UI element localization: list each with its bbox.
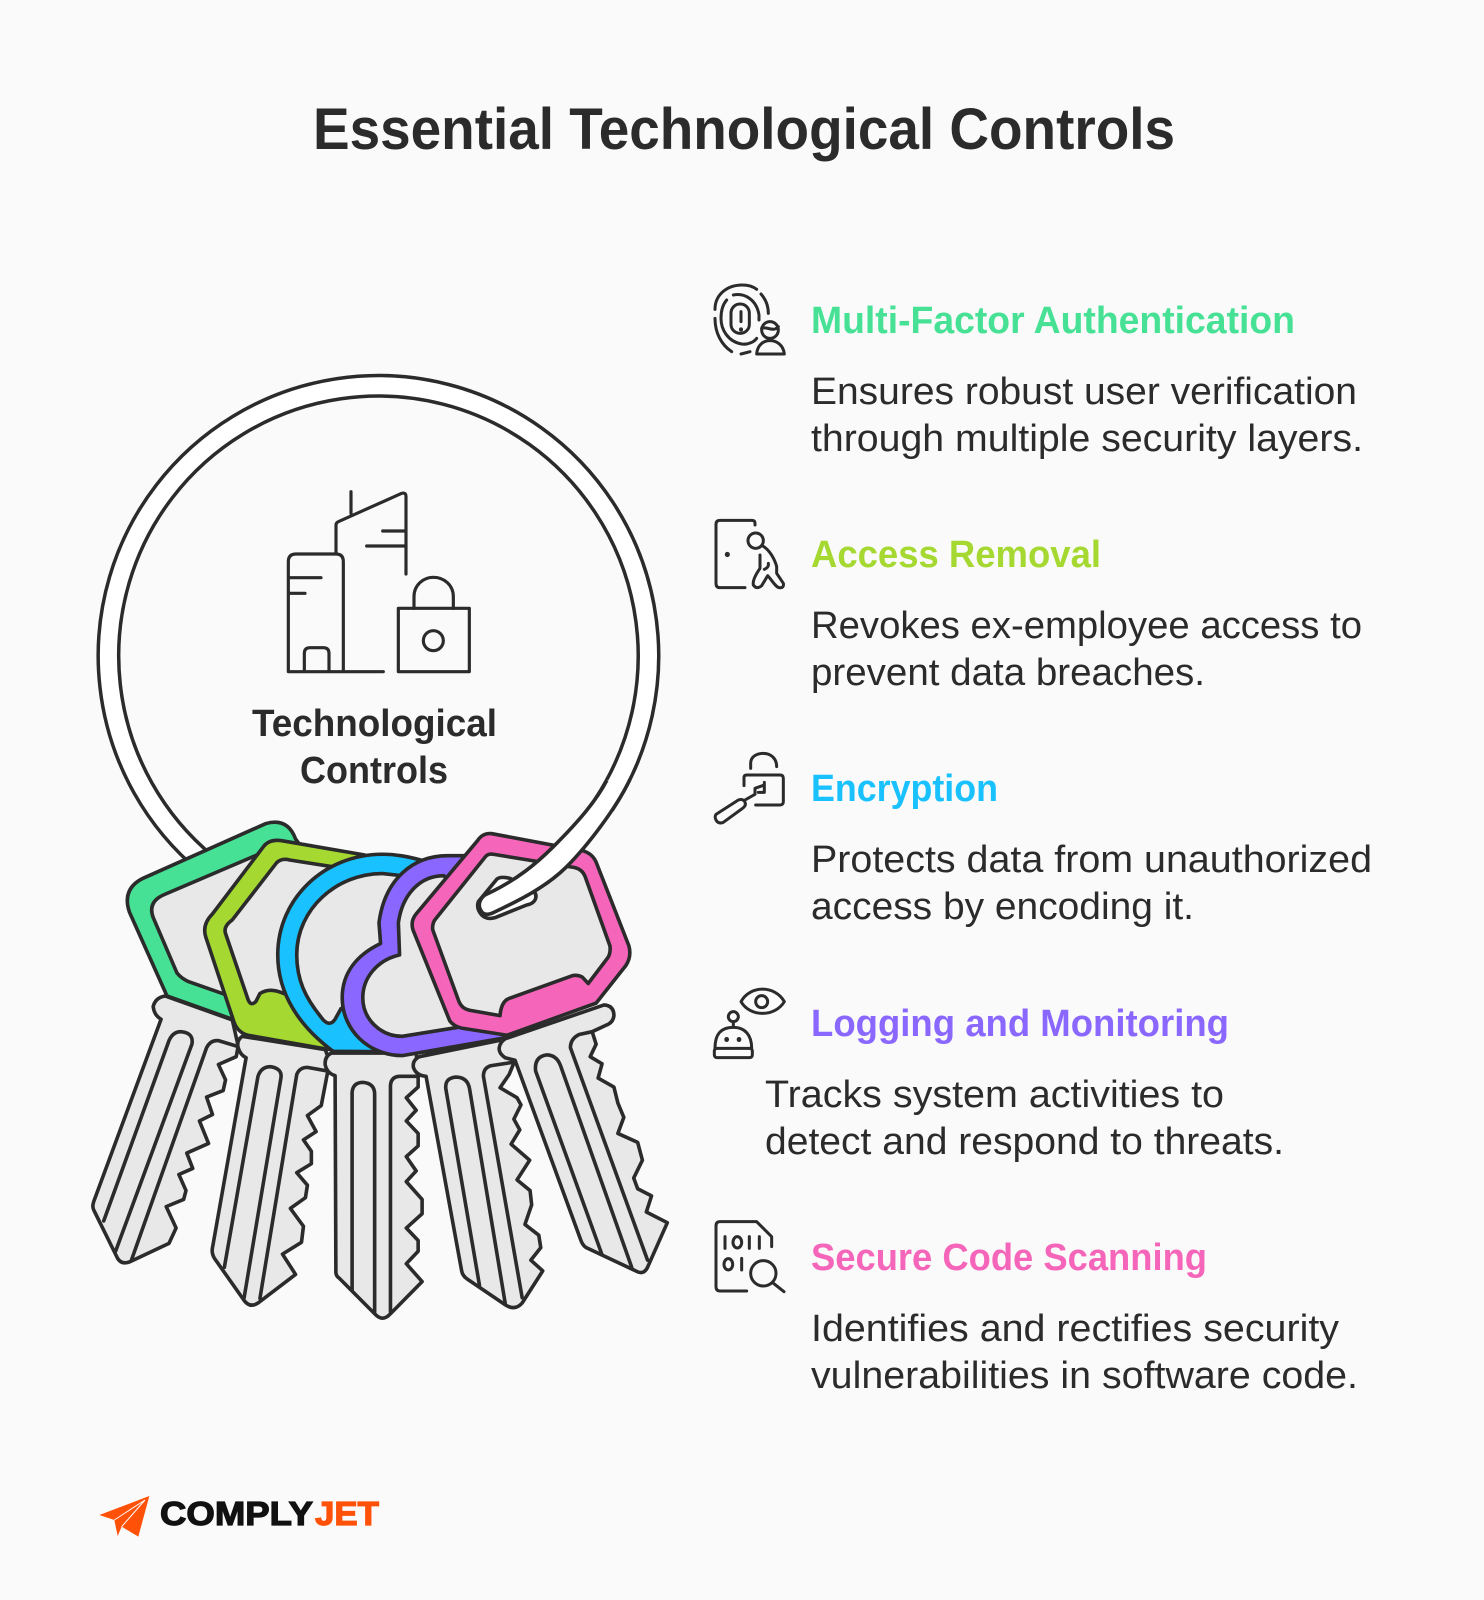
heading: Multi-Factor Authentication xyxy=(811,300,1295,342)
tag: lime xyxy=(205,840,396,1050)
key 2 xyxy=(212,1036,329,1305)
description xyxy=(811,839,1372,928)
title: Essential Technological Controls xyxy=(313,97,1175,162)
wordmark: JET xyxy=(315,1495,379,1532)
logo: ComplyJet xyxy=(99,1495,379,1537)
key 4 xyxy=(413,1039,543,1308)
key ring back xyxy=(108,386,648,864)
icon: buildings and padlock xyxy=(288,492,469,672)
wordmark: COMPLY xyxy=(160,1495,313,1532)
icon: binary file and magnifier xyxy=(716,1222,784,1292)
description: prevent data breaches. xyxy=(811,652,1205,694)
panel: logging and monitoring xyxy=(714,989,1284,1163)
heading: Secure Code Scanning xyxy=(811,1237,1207,1279)
icon: fingerprint and user xyxy=(715,285,784,354)
description: vulnerabilities in software code. xyxy=(811,1355,1358,1397)
illustration: key ring with five keys xyxy=(93,386,667,1318)
tag: purple xyxy=(342,856,515,1056)
key 5 xyxy=(499,1005,667,1273)
key 3 xyxy=(325,1053,422,1318)
tag: pink xyxy=(412,833,630,1035)
icon: person leaving door xyxy=(716,520,783,588)
central label: Technological xyxy=(252,703,497,745)
icon: paper plane xyxy=(99,1496,149,1537)
description: Protects data from unauthorized xyxy=(811,839,1372,881)
heading: Access Removal xyxy=(811,534,1101,576)
description: detect and respond to threats. xyxy=(765,1121,1284,1163)
description: access by encoding it. xyxy=(811,886,1194,928)
key 1 xyxy=(93,996,238,1263)
description xyxy=(811,1308,1358,1397)
icon: lock pick xyxy=(715,753,783,823)
description xyxy=(811,371,1363,460)
description xyxy=(811,605,1362,694)
panel: secure code scanning xyxy=(716,1222,1358,1397)
panel: multi-factor authentication xyxy=(715,285,1363,460)
tag: blue xyxy=(278,854,436,1052)
central label xyxy=(252,703,497,792)
panel: encryption xyxy=(715,753,1372,928)
central label: Controls xyxy=(300,750,448,792)
description: through multiple security layers. xyxy=(811,418,1363,460)
key ring front: end threaded through the pink tag xyxy=(478,780,630,918)
description: Revokes ex-employee access to xyxy=(811,605,1362,647)
description xyxy=(765,1074,1284,1163)
description: Tracks system activities to xyxy=(765,1074,1224,1116)
keys and tags xyxy=(93,822,667,1318)
icon: robot and eye xyxy=(714,989,784,1058)
description: Identifies and rectifies security xyxy=(811,1308,1339,1350)
description: Ensures robust user verification xyxy=(811,371,1357,413)
tag: green xyxy=(127,822,357,1020)
panel: access removal xyxy=(716,520,1362,694)
heading: Encryption xyxy=(811,768,998,810)
heading: Logging and Monitoring xyxy=(811,1003,1229,1045)
